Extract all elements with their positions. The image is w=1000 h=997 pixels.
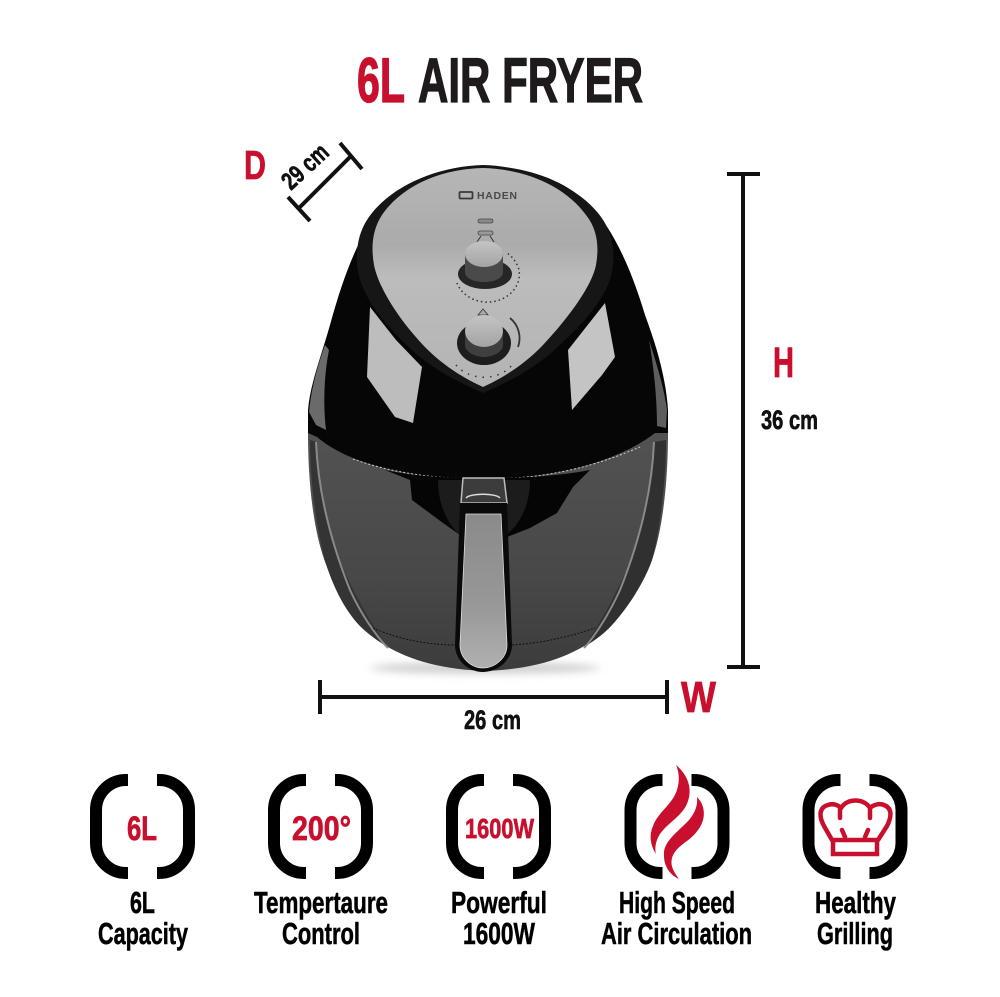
reflection right bbox=[568, 303, 615, 410]
title: AIR FRYER bbox=[418, 46, 643, 116]
label: 6L capacity: 6L bbox=[130, 885, 155, 920]
label: temperature control bbox=[254, 885, 388, 951]
label: temperature control: Control bbox=[282, 916, 360, 951]
feature: capacity bbox=[96, 780, 189, 951]
brand logo bbox=[460, 190, 517, 202]
basket bbox=[308, 433, 668, 671]
label: powerful 1600W bbox=[451, 885, 547, 951]
upper body bbox=[308, 166, 668, 500]
width dimension: 26 cm bbox=[464, 705, 521, 735]
width dimension bbox=[320, 673, 716, 735]
width dimension: W bbox=[681, 673, 716, 722]
handle mount bbox=[438, 480, 530, 535]
label: powerful 1600W: Powerful bbox=[451, 885, 547, 920]
basket side shade left bbox=[310, 440, 388, 647]
label: 6L capacity: Capacity bbox=[98, 916, 189, 951]
basket side edge right bbox=[584, 442, 654, 648]
height dimension bbox=[727, 174, 818, 667]
handle bbox=[455, 503, 512, 672]
lower seam bbox=[373, 628, 595, 645]
feature: power bbox=[451, 780, 547, 951]
height dimension: H bbox=[773, 339, 794, 387]
icon: 200 degrees brackets: 200° bbox=[292, 810, 351, 848]
feature: air circulation bbox=[601, 765, 752, 951]
depth dimension: 29 cm bbox=[276, 138, 335, 195]
label: 6L capacity bbox=[98, 885, 189, 951]
label: healthy grilling bbox=[815, 885, 897, 951]
label: healthy grilling: Healthy bbox=[815, 885, 897, 920]
depth dimension: D bbox=[244, 142, 266, 188]
icon: 6L brackets: 6L bbox=[127, 810, 157, 848]
depth dimension bbox=[244, 138, 362, 221]
label: high speed air circulation: High Speed bbox=[619, 885, 735, 920]
label: temperature control: Tempertaure bbox=[254, 885, 388, 920]
brand logo: HADEN bbox=[477, 190, 517, 202]
feature: healthy grilling bbox=[808, 780, 902, 951]
feature: temperature bbox=[254, 780, 388, 951]
icon: 1600W brackets bbox=[452, 780, 545, 873]
title bbox=[357, 46, 643, 116]
icon: flame brackets bbox=[630, 765, 724, 879]
control panel rim bbox=[357, 165, 613, 393]
label: healthy grilling: Grilling bbox=[817, 916, 893, 951]
icon: 6L brackets bbox=[96, 780, 189, 873]
indicator lights bbox=[477, 219, 494, 242]
label: high speed air circulation bbox=[601, 885, 752, 951]
title: 6L bbox=[357, 46, 405, 116]
basket side shade right bbox=[584, 440, 666, 647]
basket side edge left bbox=[316, 442, 388, 648]
temperature dial bbox=[457, 241, 519, 302]
clear button bbox=[461, 478, 507, 503]
label: powerful 1600W: 1600W bbox=[463, 916, 536, 951]
body side highlight left bbox=[309, 345, 329, 430]
floor shadow bbox=[370, 662, 600, 674]
timer dial bbox=[456, 309, 520, 377]
label: high speed air circulation: Air Circulation bbox=[601, 916, 752, 951]
icon: 1600W brackets: 1600W bbox=[465, 813, 534, 844]
icon: 200 degrees brackets bbox=[274, 780, 367, 873]
handle plate bbox=[460, 514, 507, 668]
control panel bbox=[373, 168, 597, 387]
reflection left bbox=[367, 307, 422, 423]
height dimension: 36 cm bbox=[761, 405, 818, 435]
icon: chef hat brackets bbox=[808, 780, 902, 873]
body side highlight right bbox=[649, 340, 667, 428]
basket seam bbox=[353, 447, 640, 479]
basket reflection bbox=[385, 470, 590, 537]
air fryer product bbox=[308, 165, 668, 674]
